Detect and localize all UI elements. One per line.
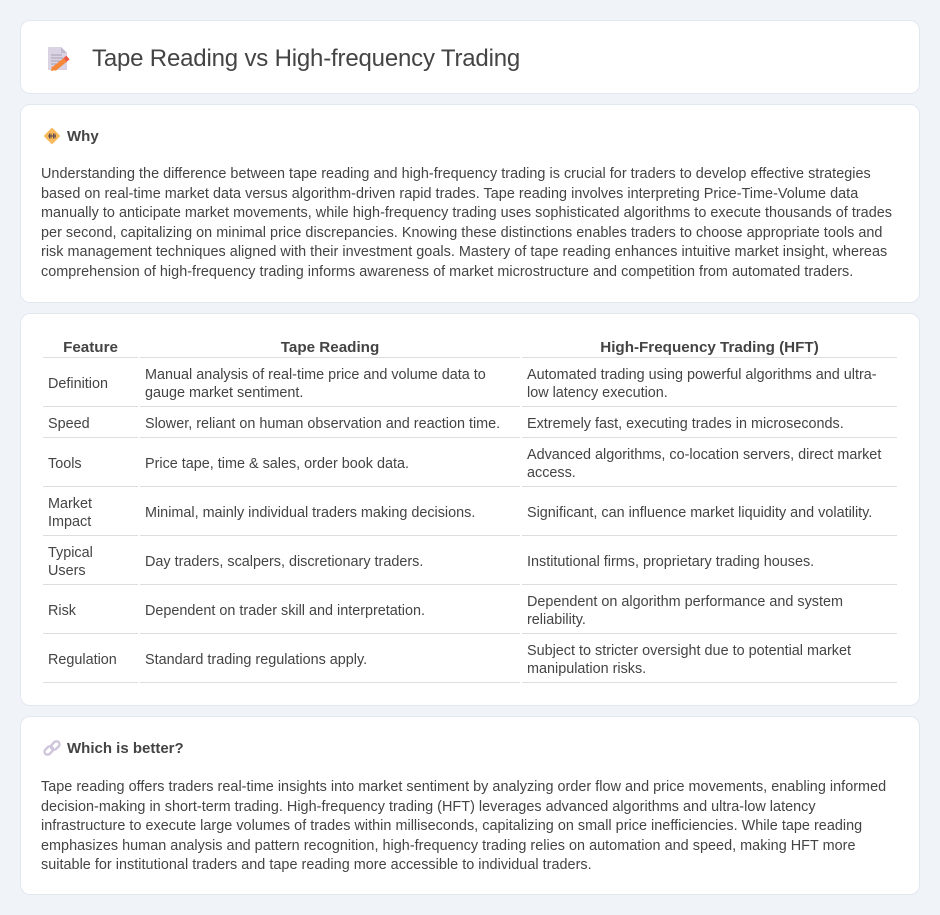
icon: chain link — [43, 740, 61, 756]
table: feature comparison: manipulation risks. — [527, 661, 646, 677]
table: feature comparison: Risk — [48, 603, 76, 619]
table: feature comparison: Market — [48, 496, 92, 512]
table: feature comparison: Institutional firms, proprietary trading houses. — [527, 554, 814, 570]
table: feature comparison: reliability. — [527, 612, 586, 628]
text block: verdict: suitable for institutional traders and tape reading more accessible to individual traders. — [41, 857, 592, 873]
table: feature comparison: Typical — [48, 545, 93, 561]
heading: which is better: Which is better? — [67, 740, 184, 757]
table: feature comparison: Subject to stricter oversight due to potential market — [527, 643, 851, 659]
table: feature comparison: gauge market sentiment. — [145, 385, 303, 401]
panel: comparison table — [20, 313, 920, 706]
text block: why explanation: risk management techniques aligned with their investment goals. Mastery of tape reading enhances intuitive market insight, whereas — [41, 244, 887, 260]
table: feature comparison: Price tape, time & sales, order book data. — [145, 456, 409, 472]
table: feature comparison: Minimal, mainly individual traders making decisions. — [145, 505, 475, 521]
table: feature comparison: Day traders, scalpers, discretionary traders. — [145, 554, 423, 570]
panel: which is better — [20, 716, 920, 895]
panel: title — [20, 20, 920, 94]
text block: why explanation: Understanding the difference between tape reading and high-frequency trading is crucial for traders to develop effective strategies — [41, 166, 871, 182]
table: feature comparison: Extremely fast, executing trades in microseconds. — [527, 416, 844, 432]
table: feature comparison: Dependent on trader skill and interpretation. — [145, 603, 425, 619]
table: feature comparison: Speed — [48, 416, 90, 432]
text block: verdict: decision-making in short-term trading. High-frequency trading (HFT) leverages advanced algorithms and ultra-low latency — [41, 799, 816, 815]
table: feature comparison: Manual analysis of real-time price and volume data to — [145, 367, 486, 383]
table: feature comparison: Impact — [48, 514, 91, 530]
table: feature comparison: Automated trading using powerful algorithms and ultra- — [527, 367, 877, 383]
table: feature comparison: low latency execution. — [527, 385, 668, 401]
text block: why explanation — [41, 166, 892, 280]
text block: why explanation: based on real-time market data versus algorithm-driven rapid trades. Tape reading involves interpreting Price-Time-Volume data — [41, 186, 858, 202]
table: feature comparison: Definition — [48, 376, 108, 392]
table: feature comparison: Standard trading regulations apply. — [145, 652, 367, 668]
table: feature comparison: Tools — [48, 456, 82, 472]
text block: why explanation: per second, capitalizing on minimal price discrepancies. Knowing these distinctions enables traders to choose appropriate tools and — [41, 225, 882, 241]
table: feature comparison: Advanced algorithms, co-location servers, direct market — [527, 447, 881, 463]
text block: why explanation: manually to anticipate market movements, while high-frequency trading uses sophisticated algorithms to execute thousands of trades — [41, 205, 892, 221]
text block: why explanation: comprehension of high-frequency trading informs awareness of market microstructure and competition from automated traders. — [41, 264, 853, 280]
text block: verdict — [41, 779, 886, 873]
table: feature comparison: High-Frequency Trading (HFT) — [600, 339, 819, 356]
icon: document with pencil — [48, 47, 70, 71]
text block: verdict: emphasizes human analysis and pattern recognition, high-frequency trading relies on automation and speed, making HFT more — [41, 838, 856, 854]
table: feature comparison: Users — [48, 563, 86, 579]
heading: page title: Tape Reading vs High-frequency Trading — [92, 45, 520, 72]
text block: verdict: infrastructure to execute large volumes of trades within milliseconds, capitalizing on small price inefficiencies. While tape reading — [41, 818, 862, 834]
table: feature comparison: Tape Reading — [281, 339, 379, 356]
heading: why: Why — [67, 128, 99, 145]
table: feature comparison — [43, 339, 897, 683]
table: feature comparison: Significant, can influence market liquidity and volatility. — [527, 505, 872, 521]
table: feature comparison: Regulation — [48, 652, 117, 668]
table: feature comparison: Slower, reliant on human observation and reaction time. — [145, 416, 500, 432]
icon: warning diamond — [44, 128, 60, 144]
table: feature comparison: Dependent on algorithm performance and system — [527, 594, 843, 610]
table: feature comparison: access. — [527, 465, 576, 481]
table: feature comparison: Feature — [63, 339, 118, 356]
panel: why — [20, 104, 920, 303]
text block: verdict: Tape reading offers traders real-time insights into market sentiment by analyzing order flow and price movements, enabling informed — [41, 779, 886, 795]
